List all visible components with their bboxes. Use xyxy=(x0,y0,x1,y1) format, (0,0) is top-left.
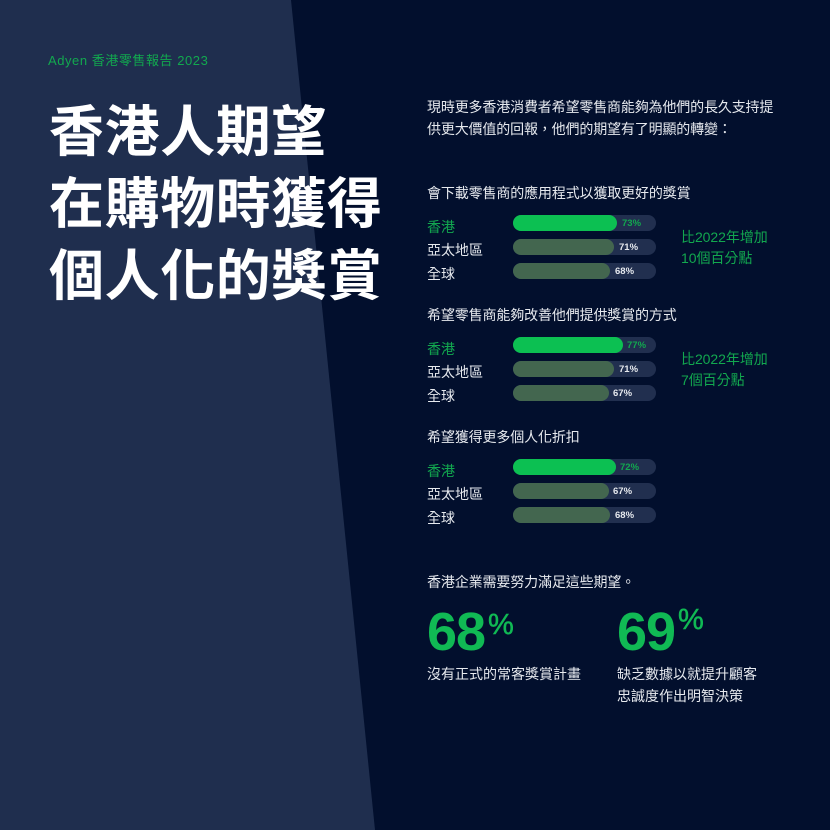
panel: app download rewards xyxy=(427,185,768,282)
intro text xyxy=(427,99,773,137)
intro text: 現時更多香港消費者希望零售商能夠為他們的長久支持提 xyxy=(427,99,773,115)
label: APAC: 亞太地區 xyxy=(427,242,483,258)
percent sign: % xyxy=(678,604,704,636)
title: 在購物時獲得 xyxy=(49,173,383,235)
bar: Hong Kong 77%: 77% xyxy=(627,340,646,351)
bar: APAC 71% xyxy=(513,361,656,377)
label: APAC: 亞太地區 xyxy=(427,364,483,380)
bar: global 67%: 67% xyxy=(613,388,632,399)
percent sign: % xyxy=(488,609,514,641)
report label: Adyen 香港零售報告 2023 xyxy=(48,53,208,68)
bar: Hong Kong 72%: 72% xyxy=(620,462,639,473)
callout: 7個百分點 xyxy=(681,372,745,388)
heading: 希望零售商能夠改善他們提供獎賞的方式 xyxy=(427,307,677,323)
bar: Hong Kong 73% xyxy=(513,215,656,231)
title: 個人化的獎賞 xyxy=(49,245,383,307)
stat: 68% xyxy=(427,602,581,682)
bar: global 68% xyxy=(513,507,656,523)
caption: 缺乏數據以就提升顧客 xyxy=(617,666,757,682)
bar: APAC 71%: 71% xyxy=(619,242,638,253)
stat: 69% xyxy=(617,602,757,704)
label: global: 全球 xyxy=(427,510,455,526)
caption: 忠誠度作出明智決策 xyxy=(617,688,743,704)
bar: Hong Kong 72% xyxy=(513,459,656,475)
bar: APAC 67% xyxy=(513,483,656,499)
bar: APAC 67%: 67% xyxy=(613,486,632,497)
label: global: 全球 xyxy=(427,266,455,282)
title xyxy=(49,101,383,307)
caption: 沒有正式的常客獎賞計畫 xyxy=(427,666,581,682)
number: 68 xyxy=(427,602,485,662)
heading: 會下載零售商的應用程式以獲取更好的獎賞 xyxy=(427,185,691,201)
callout: 10個百分點 xyxy=(681,250,752,266)
bar: global 68%: 68% xyxy=(615,266,634,277)
label: Hong Kong: 香港 xyxy=(427,219,455,235)
label: APAC: 亞太地區 xyxy=(427,486,483,502)
callout: 比2022年增加 xyxy=(681,351,768,367)
caption xyxy=(617,666,757,704)
bar: global 68% xyxy=(513,263,656,279)
callout xyxy=(681,229,768,266)
summary text: 香港企業需要努力滿足這些期望。 xyxy=(427,574,635,590)
panel: personalized discounts xyxy=(427,429,656,526)
bar: Hong Kong 73%: 73% xyxy=(622,218,641,229)
bar: APAC 71%: 71% xyxy=(619,364,638,375)
title: 香港人期望 xyxy=(49,101,327,163)
intro text: 供更大價值的回報，他們的期望有了明顯的轉變： xyxy=(427,121,732,137)
bar: global 67% xyxy=(513,385,656,401)
callout xyxy=(681,351,768,388)
label: Hong Kong: 香港 xyxy=(427,341,455,357)
label: global: 全球 xyxy=(427,388,455,404)
bar: global 68%: 68% xyxy=(615,510,634,521)
bar: Hong Kong 77% xyxy=(513,337,656,353)
callout: 比2022年增加 xyxy=(681,229,768,245)
label: Hong Kong: 香港 xyxy=(427,463,455,479)
number: 69 xyxy=(617,602,675,662)
heading: 希望獲得更多個人化折扣 xyxy=(427,429,580,445)
panel: improve rewards xyxy=(427,307,768,404)
bar: APAC 71% xyxy=(513,239,656,255)
